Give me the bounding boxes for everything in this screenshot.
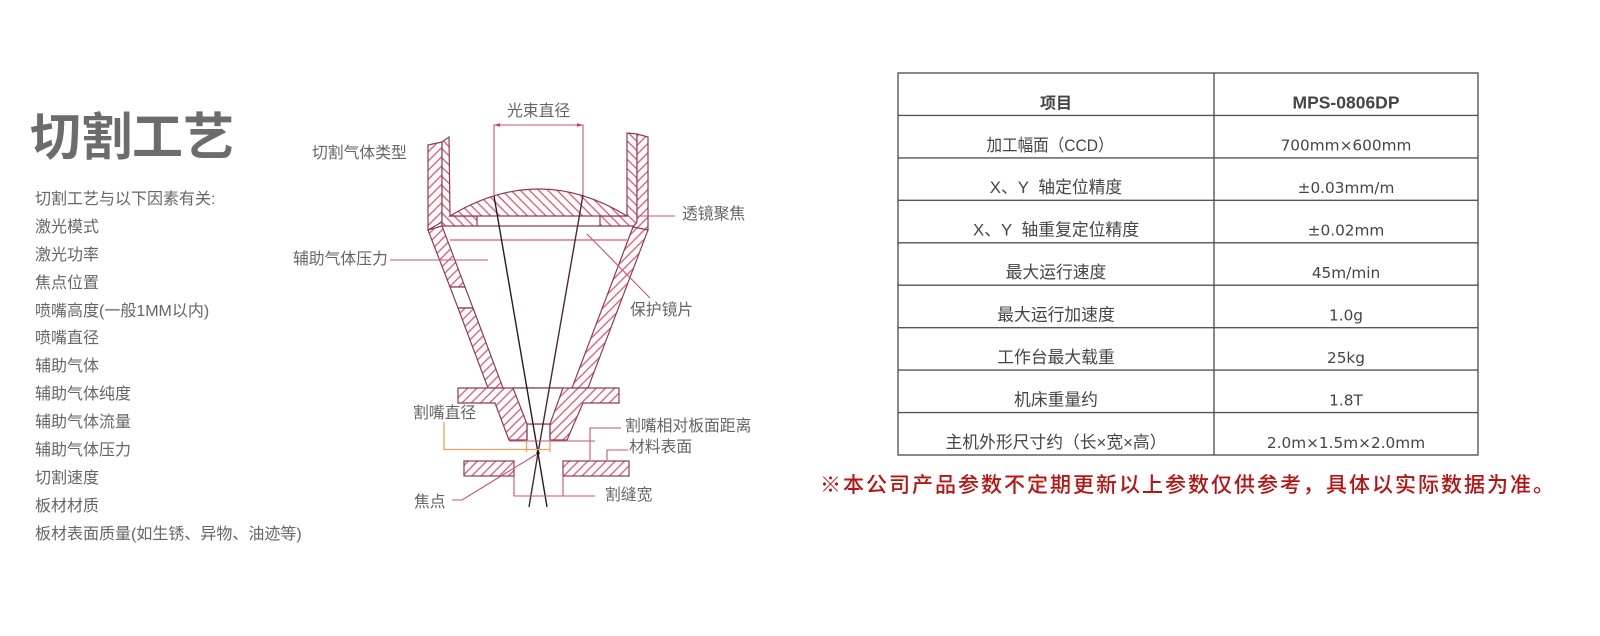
material plates <box>464 461 629 476</box>
table rows: 45m/min <box>1312 264 1380 282</box>
lens <box>450 189 627 216</box>
factor list <box>35 190 302 543</box>
label: protective lens: 保护镜片 <box>630 300 693 319</box>
table rows: 机床重量约 <box>1014 390 1098 410</box>
table grid <box>898 73 1478 455</box>
table rows: X、Y 轴定位精度 <box>990 178 1122 197</box>
label: focusing lens: 透镜聚焦 <box>682 204 745 223</box>
table header: 项目 <box>1040 96 1072 112</box>
table rows <box>946 136 1425 452</box>
disclaimer note: ※本公司产品参数不定期更新以上参数仅供参考，具体以实际数据为准。 <box>820 474 1556 497</box>
factor list: 喷嘴直径 <box>35 329 99 347</box>
table rows: 1.0g <box>1329 306 1363 324</box>
factor list: 切割工艺与以下因素有关: <box>35 190 215 208</box>
label: nozzle diameter: 割嘴直径 <box>413 404 476 422</box>
factor list: 激光功率 <box>35 246 99 264</box>
factor list: 切割速度 <box>35 469 99 487</box>
label: protective lens <box>587 234 693 319</box>
table rows: 最大运行速度 <box>1006 263 1107 282</box>
factor list: 辅助气体 <box>35 357 99 375</box>
factor list: 激光模式 <box>35 218 99 236</box>
protective lens lines <box>450 226 627 240</box>
laser beams <box>494 195 583 507</box>
table rows: X、Y 轴重复定位精度 <box>973 220 1139 240</box>
factor list: 焦点位置 <box>35 274 99 292</box>
nozzle cross-section diagram <box>293 102 751 511</box>
label: nozzle to plate distance: 割嘴相对板面距离 <box>625 417 751 435</box>
factor list: 辅助气体压力 <box>35 441 131 459</box>
table header: MPS-0806DP <box>1292 92 1400 112</box>
label: kerf width <box>514 476 653 504</box>
right cone <box>572 227 648 388</box>
factor list: 辅助气体纯度 <box>35 385 131 403</box>
label: cutting gas type: 切割气体类型 <box>312 144 407 162</box>
label: nozzle diameter <box>413 404 550 452</box>
label: material surface <box>607 438 692 460</box>
label: focusing lens <box>636 204 745 223</box>
beam diameter dimension <box>494 102 583 196</box>
label: focal point <box>414 454 537 511</box>
table rows: ±0.02mm <box>1308 222 1384 240</box>
left wall <box>428 137 477 230</box>
label: focal point: 焦点 <box>414 493 446 511</box>
table rows: 1.8T <box>1329 392 1363 410</box>
factor list: 板材材质 <box>35 497 99 515</box>
label: kerf width: 割缝宽 <box>605 486 653 504</box>
beam diameter dimension: 光束直径 <box>507 102 570 120</box>
right wall <box>600 133 648 230</box>
table rows: 2.0m×1.5m×2.0mm <box>1267 434 1425 452</box>
factor list: 喷嘴高度(一般1MM以内) <box>35 302 209 320</box>
label: nozzle to plate distance <box>509 417 751 460</box>
flange and nozzle tip <box>458 388 619 440</box>
factor list: 辅助气体流量 <box>35 413 131 431</box>
table rows: 25kg <box>1327 349 1365 367</box>
title: 切割工艺 <box>30 96 234 170</box>
table header <box>1040 92 1400 112</box>
label: material surface: 材料表面 <box>629 438 692 456</box>
table rows: 加工幅面（CCD） <box>986 136 1114 155</box>
table rows: 主机外形尺寸约（长×宽×高） <box>946 433 1166 452</box>
spec table <box>898 73 1478 455</box>
table rows: 工作台最大载重 <box>997 348 1115 367</box>
left cone <box>428 226 503 388</box>
factor list: 板材表面质量(如生锈、异物、油迹等) <box>35 525 302 543</box>
table rows: 最大运行加速度 <box>997 306 1115 324</box>
table rows: 700mm×600mm <box>1281 136 1411 154</box>
table rows: ±0.03mm/m <box>1298 179 1394 197</box>
label: assist gas pressure: 辅助气体压力 <box>293 250 388 268</box>
